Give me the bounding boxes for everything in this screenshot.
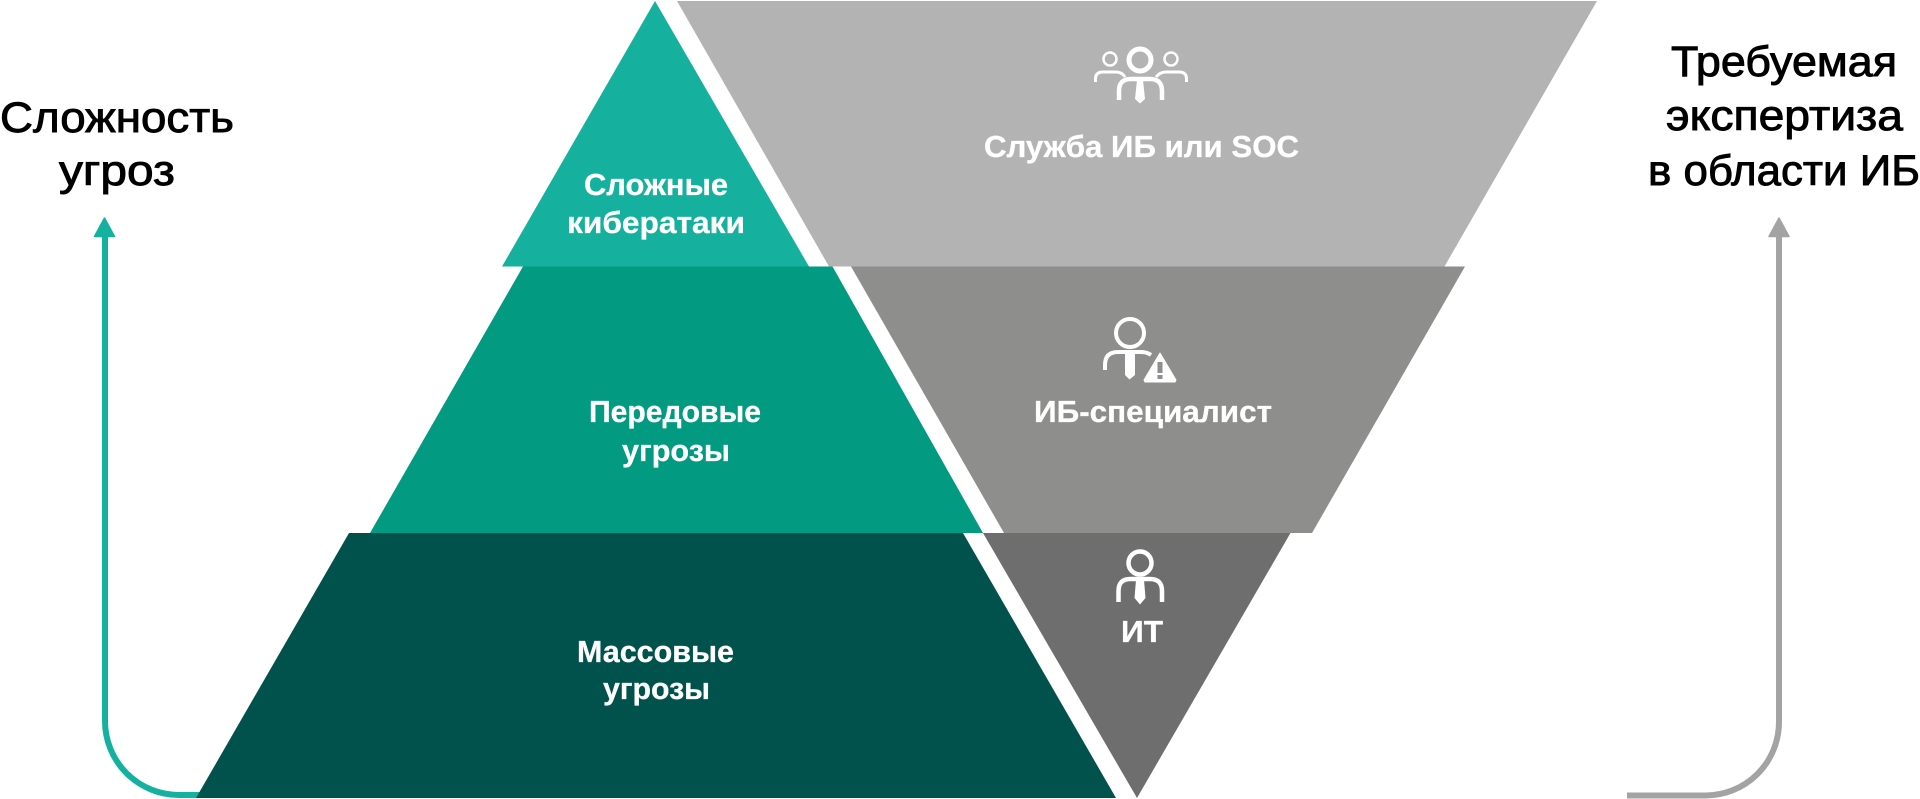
inverted tier: IT [983, 533, 1290, 798]
arrow: required expertise axis [1627, 218, 1789, 796]
pyramid tier: mass threats: Массовые [577, 634, 734, 669]
heading: required expertise: Требуемая [1671, 38, 1897, 86]
inverted tier: security team or SOC [677, 1, 1597, 266]
pyramid tier: complex cyberattacks [502, 1, 809, 266]
pyramid tier: advanced threats [370, 266, 983, 533]
arrow: threat complexity axis [94, 218, 390, 795]
pyramid tier: advanced threats: Передовые [589, 394, 761, 429]
inverted tier: security specialist [851, 266, 1465, 533]
heading: required expertise: экспертиза [1666, 92, 1903, 140]
icon: team of three people [1096, 49, 1186, 104]
heading: threat complexity [0, 94, 234, 195]
inverted tier: security team or SOC: Служба ИБ или SOC [984, 129, 1299, 164]
pyramid tier: complex cyberattacks: Сложные [584, 167, 728, 202]
panel: threat pyramid [196, 1, 1116, 798]
icon: specialist with warning sign [1105, 319, 1176, 382]
heading: required expertise: в области ИБ [1648, 147, 1920, 195]
pyramid tier: mass threats: угрозы [603, 671, 710, 706]
heading: threat complexity: угроз [59, 147, 175, 195]
pyramid tier: advanced threats: угрозы [622, 433, 730, 468]
heading: threat complexity: Сложность [0, 94, 234, 142]
panel: expertise inverted pyramid [677, 1, 1597, 798]
pyramid tier: mass threats [196, 533, 1116, 798]
inverted tier: IT: ИТ [1121, 614, 1163, 649]
inverted tier: security specialist: ИБ-специалист [1034, 394, 1272, 429]
pyramid tier: complex cyberattacks: кибератаки [567, 205, 745, 240]
heading: required expertise [1648, 38, 1920, 195]
icon: IT person [1118, 552, 1162, 604]
